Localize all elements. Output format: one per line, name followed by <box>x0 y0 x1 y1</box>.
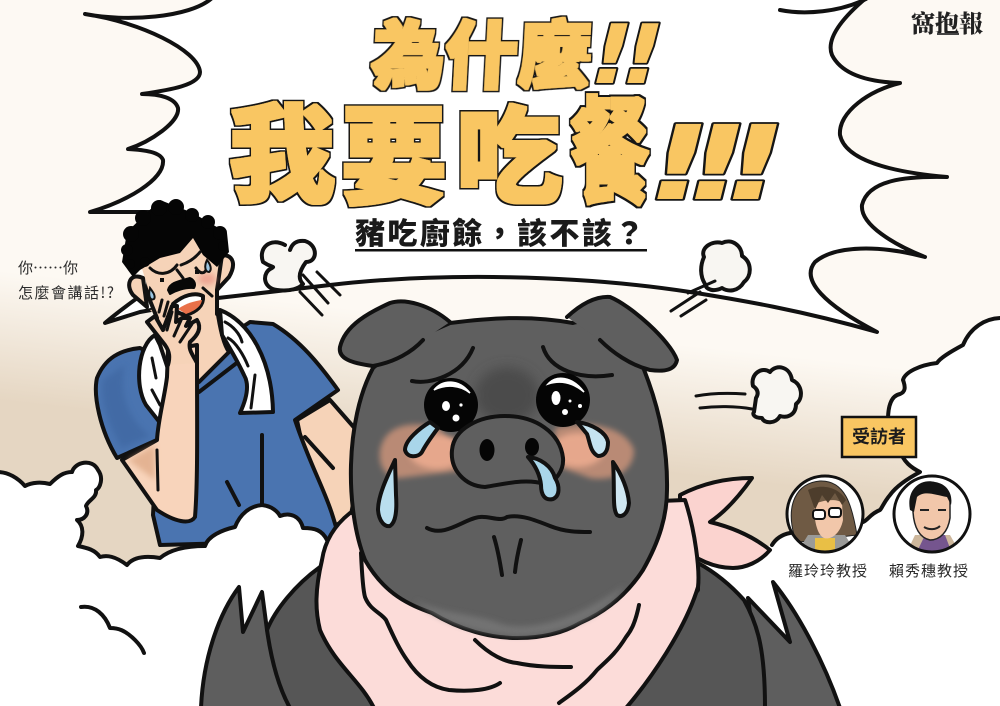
icon: steam puff right <box>671 241 750 316</box>
man's dialogue <box>18 257 115 303</box>
snout <box>452 416 563 487</box>
name: 羅玲玲教授: 羅玲玲教授 <box>788 560 868 581</box>
right wing <box>748 582 840 706</box>
title: 為什麼!!: 為什麼 <box>370 0 594 104</box>
portrait: 賴秀穗 <box>894 476 970 556</box>
ear left <box>129 276 147 307</box>
hand and fingers <box>147 306 199 365</box>
towel left <box>139 335 170 424</box>
icon: steam puff left <box>262 241 340 315</box>
portrait: 羅玲玲 <box>787 476 863 556</box>
cheek blush inner right <box>552 433 604 467</box>
interviewee label <box>842 417 916 457</box>
speech bubble <box>85 0 947 332</box>
neck <box>150 300 230 382</box>
forearm crease <box>157 450 158 490</box>
icon: steam puff lower right <box>696 367 801 422</box>
scarf wrap <box>316 500 698 706</box>
right arm skin <box>297 400 365 530</box>
brows <box>412 347 612 382</box>
wrinkles <box>159 288 212 316</box>
cheek blush inner left <box>409 435 465 469</box>
logo: 窩抱報 <box>911 4 983 39</box>
upper arm and forearm <box>122 345 197 521</box>
sweat drops <box>149 260 211 299</box>
pig body and arms <box>201 563 840 706</box>
left cloud <box>0 463 345 706</box>
tear: left drop <box>378 460 396 526</box>
title: 我要吃餐!!! <box>229 59 802 227</box>
blue shirt <box>96 322 340 545</box>
tongue <box>178 300 202 314</box>
curly hair <box>121 199 229 277</box>
title: 我要吃餐!!!: 我 <box>229 70 335 224</box>
tear: left eye <box>405 422 438 456</box>
forehead shadow between the eyes <box>475 367 539 423</box>
right ear <box>567 297 677 371</box>
tear: nose <box>528 457 559 499</box>
left eye <box>424 378 478 432</box>
man's dialogue: 怎麼會講話!? <box>18 282 115 303</box>
right cloud <box>690 318 1000 706</box>
towel folds <box>152 322 255 408</box>
pig head <box>340 297 677 638</box>
moustache <box>168 278 195 294</box>
small cloud curl <box>81 607 144 653</box>
left ear <box>340 301 450 366</box>
cheek blush left <box>380 424 465 478</box>
left body <box>267 567 380 706</box>
title: 我要吃餐!!!: 餐 <box>570 59 650 227</box>
right eye <box>536 373 590 427</box>
title: 我要吃餐!!!: !!! <box>631 103 802 223</box>
shirt shading <box>102 365 150 448</box>
left wing <box>201 587 293 706</box>
towel right <box>220 310 273 413</box>
neck and collar outline <box>199 308 238 392</box>
man's dialogue: 你……你 <box>18 257 78 278</box>
open mouth <box>173 294 203 315</box>
title: 我要吃餐!!!: 要 <box>341 72 447 226</box>
upper arm shading <box>128 445 155 480</box>
cheek blush <box>198 273 216 285</box>
man: farmer with towel <box>96 199 365 545</box>
face outline <box>143 283 217 318</box>
face <box>140 232 222 339</box>
right body <box>600 563 765 706</box>
scarf knot tail <box>680 478 770 568</box>
pig scarf <box>316 478 770 706</box>
title: 我要吃餐!!!: 吃 <box>456 72 562 226</box>
shirt fold lines <box>227 435 333 505</box>
tear: right eye <box>577 422 608 456</box>
finger lines <box>167 312 192 342</box>
title: 為什麼!!: !! <box>578 8 676 103</box>
nostrils <box>480 438 539 461</box>
closed eye and brows <box>150 252 206 278</box>
eye dots <box>160 270 199 282</box>
scarf fold lines <box>361 553 639 703</box>
interviewee label: 受訪者 <box>852 423 906 449</box>
cheek blush right <box>555 424 634 479</box>
tear: right drop <box>613 462 629 516</box>
subtitle with underline: 豬吃廚餘，該不該？ <box>355 209 647 253</box>
mouth <box>427 516 590 532</box>
chin lines <box>494 537 521 575</box>
ear right <box>217 255 233 290</box>
name: 賴秀穗教授: 賴秀穗教授 <box>889 560 969 581</box>
chin shading <box>415 585 625 636</box>
